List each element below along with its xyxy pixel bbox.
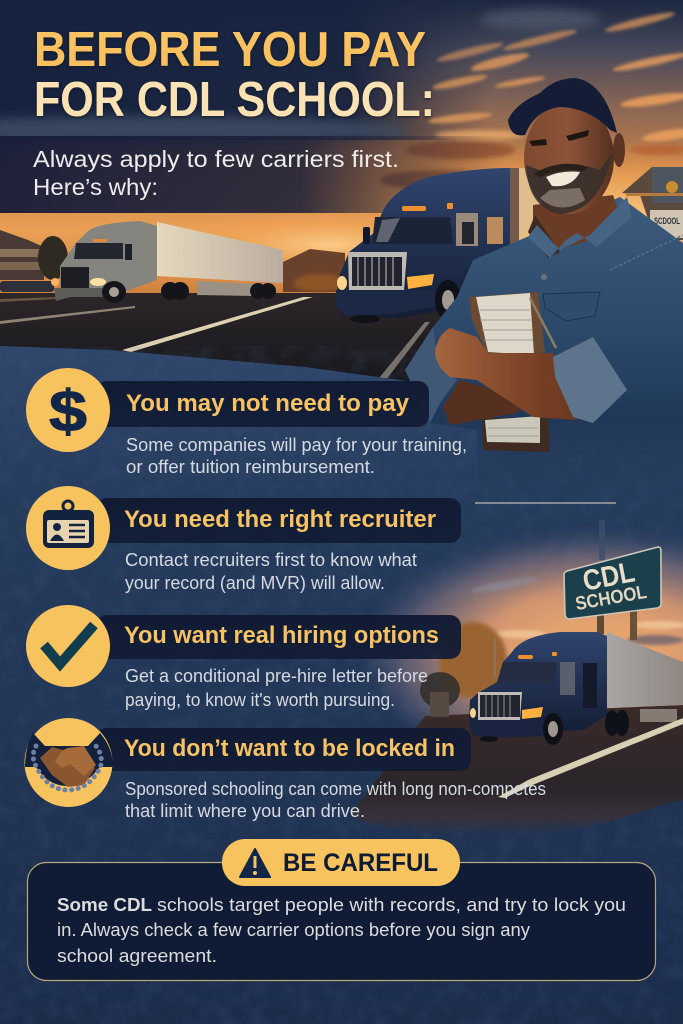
- heading bar: You may not need to pay: [126, 390, 410, 417]
- subtitle band: [0, 136, 500, 213]
- neck: [533, 195, 618, 250]
- heading bar: You want real hiring options: [124, 622, 439, 649]
- lower forearm: [443, 380, 530, 425]
- collar: [528, 197, 632, 258]
- cap: [508, 78, 617, 135]
- title: [34, 23, 435, 127]
- distant hills and building: [0, 230, 346, 292]
- background: sunset sky: [0, 0, 683, 360]
- icon: check mark: [26, 605, 110, 687]
- heading bar: You don’t want to be locked in: [124, 735, 455, 762]
- icon: chained handshake: [24, 718, 113, 807]
- road sign: [564, 547, 661, 619]
- right sleeve: [553, 337, 627, 423]
- beard: [526, 152, 613, 214]
- thin horizon streak: [475, 502, 616, 504]
- lower background panel: [0, 346, 683, 1024]
- icon: id badge: [26, 486, 110, 570]
- panel box: [28, 862, 656, 980]
- description: or offer tuition reimbursement.: [126, 457, 375, 477]
- description: Contact recruiters first to know what: [125, 550, 417, 570]
- dark inner collar: [528, 215, 560, 258]
- tree: [420, 622, 507, 708]
- posts: [597, 612, 604, 634]
- pocket and seams: [543, 292, 600, 321]
- warning text: Some CDL: [57, 895, 152, 915]
- lower trailer: [607, 632, 683, 708]
- row 3: you want real hiring options: [26, 605, 461, 710]
- small vehicle: [430, 692, 449, 717]
- warning text: in. Always check a few carrier options before you sign any: [57, 920, 530, 940]
- face: [524, 102, 614, 214]
- lower truck cab: [469, 632, 607, 735]
- left sleeve: [405, 327, 457, 423]
- clipboard: [469, 292, 556, 452]
- warning panel: [28, 839, 656, 980]
- description: Some companies will pay for your training,: [126, 435, 467, 455]
- heading bar: [96, 498, 461, 543]
- road line: [498, 718, 683, 798]
- row 2: you need the right recruiter: [26, 486, 461, 593]
- warning text: schools target people with records, and try to lock you: [157, 895, 626, 915]
- description: that limit where you can drive.: [125, 801, 365, 821]
- eyes: [529, 139, 547, 146]
- subtitle: Here’s why:: [33, 174, 158, 200]
- description: paying, to know it's worth pursuing.: [125, 690, 395, 710]
- shirt: [405, 197, 683, 505]
- heading bar: [96, 615, 461, 659]
- title: FOR CDL SCHOOL:: [34, 73, 435, 127]
- ear: [613, 133, 625, 167]
- description: your record (and MVR) will allow.: [125, 573, 385, 593]
- truck: dark blue, centre: [336, 168, 547, 323]
- icon: warning triangle: [240, 849, 270, 877]
- icon: dollar sign: [26, 368, 110, 452]
- building with school sign: [622, 167, 683, 240]
- road sign: SCHOOL: [574, 582, 649, 615]
- road: [0, 293, 470, 390]
- warning text: school agreement.: [57, 946, 217, 966]
- description: Get a conditional pre-hire letter before: [125, 666, 428, 686]
- smile: [546, 172, 580, 186]
- title: BEFORE YOU PAY: [34, 23, 426, 77]
- road sign: CDL: [580, 556, 637, 598]
- truck: silver, left: [51, 221, 283, 303]
- rows: [24, 368, 546, 821]
- row 1: you may not need to pay: [26, 368, 467, 477]
- man with clipboard: [405, 78, 683, 505]
- badge: be careful: [222, 839, 460, 886]
- badge: be careful: BE CAREFUL: [283, 849, 438, 877]
- lower scene: sky, road, sign and truck: [350, 502, 683, 838]
- heading bar: [96, 728, 471, 771]
- description: Sponsored schooling can come with long non-competes: [125, 779, 546, 799]
- icon: dollar sign: $: [49, 379, 87, 444]
- heading bar: [96, 381, 429, 427]
- upper forearm and hand: [435, 328, 577, 420]
- row 4: you don't want to be locked in: [24, 718, 546, 821]
- heading bar: You need the right recruiter: [124, 506, 436, 533]
- subtitle: Always apply to few carriers first.: [33, 146, 399, 172]
